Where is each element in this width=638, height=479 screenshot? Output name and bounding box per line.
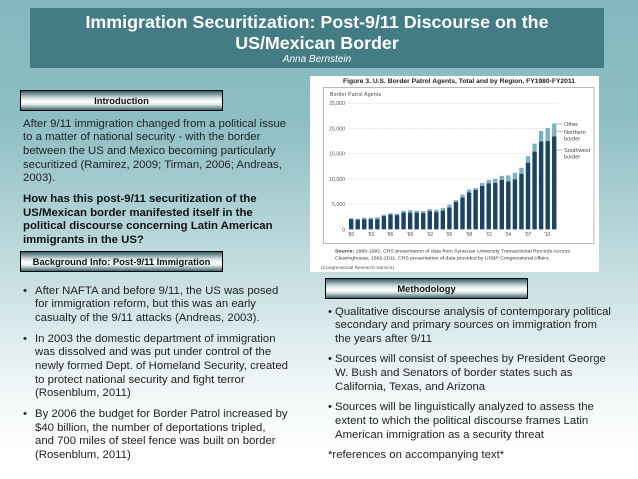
- text block: methodology bullets: Sources will consist of speeches by President George: [335, 353, 606, 365]
- heading: methodology: Methodology: [397, 283, 456, 294]
- text block: introduction: to a matter of national security - with the border: [23, 131, 260, 143]
- chart: border patrol agents: '10: [544, 232, 550, 238]
- text block: methodology bullets: •: [328, 306, 332, 318]
- text block: background bullets: for immigration reform, but this was an early: [35, 298, 256, 310]
- heading: methodology: [325, 278, 528, 299]
- text block: methodology bullets: [328, 306, 611, 461]
- chart: border patrol agents: '04: [505, 232, 511, 238]
- chart: border patrol agents: 25,000: [329, 101, 345, 107]
- chart: border patrol agents: '86: [387, 232, 393, 238]
- text block: introduction: [23, 118, 286, 184]
- research question: [23, 193, 273, 246]
- text block: background bullets: casualty of the 9/11 attacks (Andreas, 2003).: [35, 312, 260, 324]
- chart: border patrol agents: Border Patrol Agents: [330, 92, 382, 98]
- chart: border patrol agents: Source: 1980-1991: CRS presentation of data from Syracuse University Transactional Records Access: [335, 248, 571, 254]
- chart: border patrol agents: border: [564, 154, 580, 160]
- research question: immigrants in the US?: [23, 234, 144, 246]
- chart: border patrol agents: border: [564, 136, 580, 142]
- chart: border patrol agents: '92: [427, 232, 433, 238]
- text block: background bullets: After NAFTA and before 9/11, the US was posed: [35, 285, 278, 297]
- heading: background info: Background Info: Post-9/11 Immigration: [33, 256, 210, 267]
- text block: background bullets: and 700 miles of steel fence was built on border: [35, 435, 276, 447]
- chart: border patrol agents: (Congressional Research Service): [321, 265, 394, 270]
- text block: background bullets: newly formed Dept. of Homeland Security, created: [35, 360, 288, 372]
- chart: border patrol agents: Figure 3. U.S. Border Patrol Agents, Total and by Region, FY1980-FY2011: [343, 78, 576, 85]
- bars: total (light): [349, 123, 556, 229]
- research question: US/Mexican border manifested itself in the: [23, 207, 253, 219]
- title: US/Mexican Border: [235, 33, 399, 53]
- text block: methodology bullets: extent to which the political discourse frames Latin: [335, 415, 588, 427]
- text block: background bullets: By 2006 the budget for Border Patrol increased by: [35, 408, 288, 420]
- chart: border patrol agents: 10,000: [329, 177, 345, 183]
- text block: methodology bullets: California, Texas, and Arizona: [335, 381, 485, 393]
- chart: border patrol agents: 20,000: [329, 126, 345, 132]
- heading: introduction: [20, 90, 223, 111]
- chart: border patrol agents: '83: [368, 232, 374, 238]
- chart: border patrol agents: '01: [486, 232, 492, 238]
- text block: background bullets: In 2003 the domestic department of immigration: [35, 333, 276, 345]
- chart: border patrol agents: '98: [466, 232, 472, 238]
- heading: background info: [20, 251, 223, 272]
- text block: background bullets: was dissolved and was put under control of the: [35, 346, 271, 358]
- chart: border patrol agents: Northern: [564, 130, 586, 136]
- text block: background bullets: •: [23, 333, 27, 345]
- heading: introduction: Introduction: [94, 95, 149, 106]
- text block: background bullets: $40 billion, the number of deportations tripled,: [35, 422, 266, 434]
- text block: background bullets: (Rosenblum, 2011): [35, 387, 131, 399]
- text block: methodology bullets: the years after 9/11: [335, 333, 432, 345]
- chart: border patrol agents: Other: [564, 122, 578, 128]
- chart: border patrol agents: 0: [342, 228, 345, 234]
- text block: methodology bullets: American immigration as a security threat: [335, 429, 544, 441]
- chart: border patrol agents: '07: [525, 232, 531, 238]
- text block: introduction: After 9/11 immigration changed from a political issue: [23, 118, 286, 130]
- text block: methodology bullets: Sources will be linguistically analyzed to assess the: [335, 401, 594, 413]
- text block: methodology bullets: •: [328, 353, 332, 365]
- text block: methodology bullets: secondary and primary sources on immigration from: [335, 319, 597, 331]
- chart: border patrol agents: '89: [407, 232, 413, 238]
- text block: background bullets: [23, 285, 288, 461]
- research question: How has this post-9/11 securitization of the: [23, 193, 257, 205]
- text block: background bullets: •: [23, 285, 27, 297]
- chart: border patrol agents: Southwest: [564, 148, 591, 154]
- title banner: [30, 8, 604, 68]
- title: Immigration Securitization: Post-9/11 Discourse on the: [85, 12, 549, 32]
- text block: methodology bullets: •: [328, 401, 332, 413]
- text block: introduction: between the US and Mexico becoming particularly: [23, 145, 276, 157]
- research question: political discourse concerning Latin American: [23, 220, 273, 232]
- text block: methodology bullets: *references on accompanying text*: [328, 449, 504, 461]
- text block: introduction: 2003).: [23, 172, 55, 184]
- author: Anna Bernstein: [283, 54, 351, 65]
- text block: background bullets: to protect national security and fight terror: [35, 374, 245, 386]
- text block: background bullets: •: [23, 408, 27, 420]
- bars: southwest border (dark): [349, 137, 556, 229]
- chart: border patrol agents: '95: [446, 232, 452, 238]
- chart: border patrol agents: Clearinghouse; 1992-2011: CRS presentation of data provided by USBP Congressional Affairs.: [335, 256, 550, 262]
- text block: background bullets: (Rosenblum, 2011): [35, 449, 131, 461]
- text block: methodology bullets: W. Bush and Senators of border states such as: [335, 367, 572, 379]
- title: [85, 12, 549, 53]
- text block: introduction: securitized (Ramirez, 2009; Tirman, 2006; Andreas,: [23, 159, 282, 171]
- chart: border patrol agents: '80: [348, 232, 354, 238]
- text block: methodology bullets: Qualitative discourse analysis of contemporary political: [335, 306, 611, 318]
- chart: border patrol agents: 15,000: [329, 152, 345, 158]
- chart: border patrol agents: 5,000: [332, 202, 345, 208]
